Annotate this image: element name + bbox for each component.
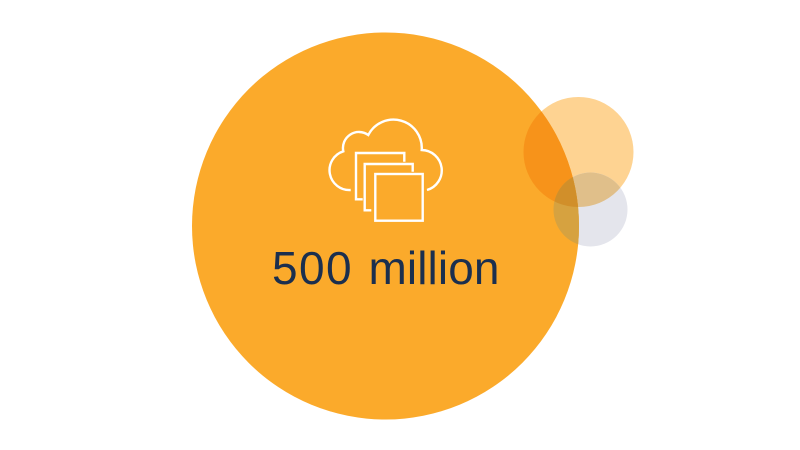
light orange circle bbox=[524, 97, 634, 207]
grey circle bbox=[554, 172, 628, 246]
overlap: all three circles bbox=[554, 177, 578, 207]
overlap: light orange and grey bbox=[572, 172, 620, 207]
icon: cloud with stacked documents bbox=[330, 120, 442, 221]
large orange circle bbox=[192, 32, 579, 420]
overlap: large circle and grey bbox=[554, 178, 579, 244]
overlap: large circle and light orange bbox=[524, 112, 578, 204]
metric label: million bbox=[368, 242, 500, 294]
infographic: overlapping circles bbox=[192, 32, 634, 420]
metric label: 500 bbox=[272, 242, 353, 294]
